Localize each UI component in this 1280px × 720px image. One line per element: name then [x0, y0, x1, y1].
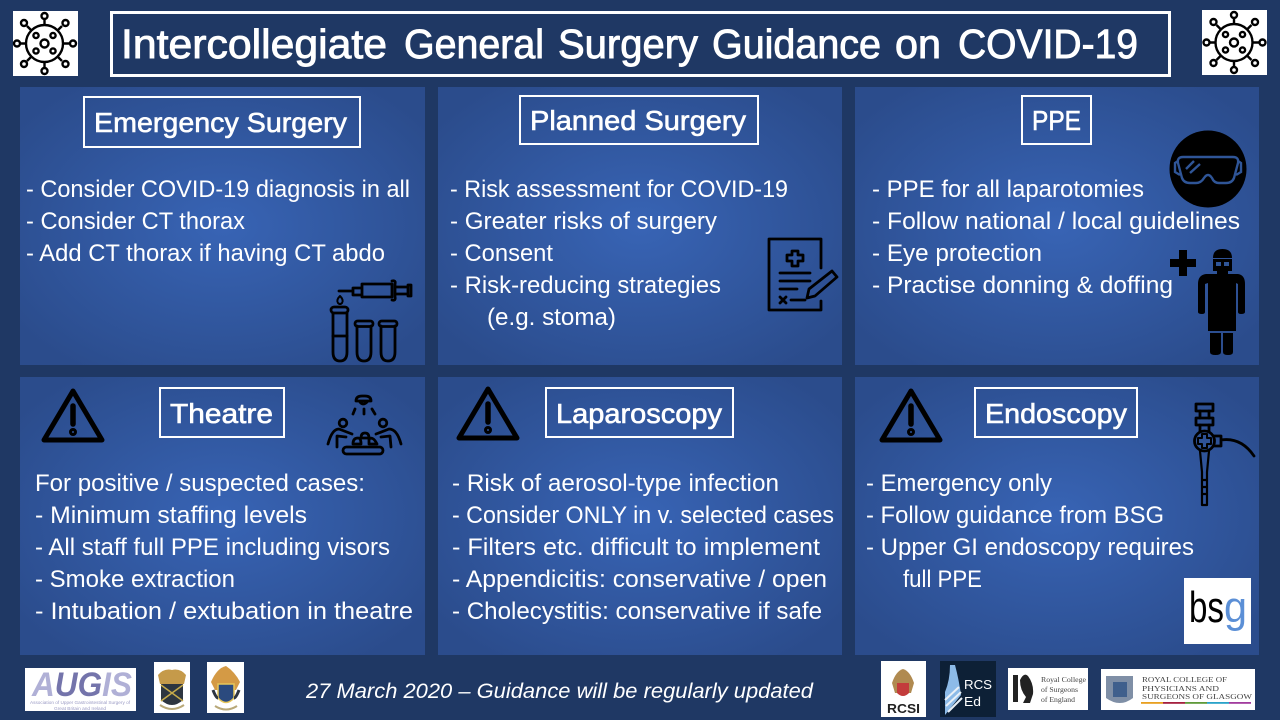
text: laparoscopy points: - Appendicitis: conservative / open	[452, 566, 827, 593]
title	[112, 12, 1170, 76]
text: PPE points: - Practise donning & doffing	[872, 272, 1173, 299]
text: theatre points: - Minimum staffing levels	[35, 502, 307, 529]
icon: virus left	[13, 11, 78, 76]
logo: BSG	[1184, 578, 1251, 644]
panel: endoscopy	[855, 377, 1259, 655]
title: Surgery	[558, 21, 698, 67]
heading: emergency surgery: Emergency Surgery	[94, 107, 347, 138]
logo: RCSEd	[940, 661, 996, 717]
logo: crest one	[154, 662, 190, 713]
heading: emergency surgery	[84, 97, 360, 147]
logo: RCSEd: Ed	[964, 694, 981, 709]
icon: warning triangle theatre	[44, 391, 102, 440]
icon: warning triangle laparoscopy	[459, 389, 517, 438]
text: planned surgery points: - Greater risks of surgery	[450, 208, 718, 235]
panel: planned surgery	[438, 87, 842, 365]
logo: BSG: bs	[1189, 583, 1224, 632]
logo: crest two	[207, 662, 244, 713]
logo: BSG: g	[1224, 583, 1247, 632]
text: theatre points: For positive / suspected cases:	[35, 470, 365, 497]
title: COVID-19	[958, 21, 1138, 67]
text: theatre points: - All staff full PPE including visors	[35, 534, 390, 561]
heading: planned surgery: Planned Surgery	[530, 105, 746, 136]
text: PPE points: - PPE for all laparotomies	[872, 176, 1144, 203]
text: theatre points	[35, 470, 413, 625]
text: laparoscopy points: - Consider ONLY in v. selected cases	[452, 502, 834, 529]
text: planned surgery points: - Consent	[450, 240, 553, 267]
panel: PPE	[855, 87, 1259, 365]
icon: syringe and test tubes	[331, 281, 411, 361]
text: PPE points: - Eye protection	[872, 240, 1042, 267]
text: endoscopy points: - Follow guidance from BSG	[866, 502, 1164, 529]
heading: planned surgery	[520, 96, 758, 144]
text: endoscopy points	[866, 470, 1194, 593]
logo: RCSEd: RCS	[964, 677, 992, 692]
logo: AUGIS: Great Britain and Ireland	[54, 706, 107, 711]
logo: Royal College of Surgeons of England	[1008, 668, 1088, 710]
heading: PPE	[1022, 96, 1091, 144]
icon: gown and plus	[1170, 249, 1245, 355]
logo: Royal College of Physicians and Surgeons of Glasgow	[1101, 669, 1255, 710]
logo: Royal College of Physicians and Surgeons of Glasgow: PHYSICIANS AND	[1142, 684, 1220, 693]
footer date note: 27 March 2020 – Guidance will be regularly updated	[305, 679, 814, 703]
icon: warning triangle endoscopy	[882, 391, 940, 440]
icon: operating theatre	[328, 396, 401, 454]
panel: laparoscopy	[438, 377, 842, 655]
logo: Royal College of Surgeons of England: of Surgeons	[1041, 685, 1078, 694]
text: laparoscopy points	[452, 470, 834, 625]
logo: RCSI: RCSI	[887, 702, 920, 716]
title: on	[895, 21, 941, 67]
heading: theatre: Theatre	[170, 398, 273, 429]
icon: endoscope	[1194, 404, 1254, 505]
logo: AUGIS: Association of Upper Gastrointestinal Surgery of	[30, 700, 131, 705]
heading: laparoscopy	[546, 388, 733, 437]
title: General	[404, 21, 544, 67]
text: laparoscopy points: - Risk of aerosol-type infection	[452, 470, 779, 497]
logo: AUGIS: AUGIS	[31, 666, 132, 704]
title: Guidance	[712, 21, 881, 67]
text: emergency surgery points: - Add CT thorax if having CT abdo	[26, 240, 385, 267]
text: planned surgery points: - Risk-reducing strategies	[450, 272, 721, 299]
logo: Royal College of Physicians and Surgeons of Glasgow: SURGEONS OF GLASGOW	[1142, 692, 1253, 701]
icon: virus right	[1202, 10, 1267, 75]
text: emergency surgery points	[26, 176, 410, 267]
logo: Royal College of Surgeons of England: Royal College	[1041, 675, 1087, 684]
text: emergency surgery points: - Consider COVID-19 diagnosis in all	[26, 176, 410, 203]
text: planned surgery points: (e.g. stoma)	[487, 304, 616, 331]
heading: endoscopy	[975, 388, 1137, 437]
heading: endoscopy: Endoscopy	[985, 398, 1127, 429]
icon: consent form	[769, 239, 837, 310]
text: theatre points: - Smoke extraction	[35, 566, 235, 593]
logo: Royal College of Physicians and Surgeons of Glasgow: ROYAL COLLEGE OF	[1142, 675, 1227, 684]
text: theatre points: - Intubation / extubation in theatre	[35, 598, 413, 625]
text: PPE points: - Follow national / local guidelines	[872, 208, 1240, 235]
icon: goggles	[1170, 130, 1246, 208]
text: laparoscopy points: - Cholecystitis: conservative if safe	[452, 598, 822, 625]
text: planned surgery points: - Risk assessment for COVID-19	[450, 176, 788, 203]
heading: theatre	[160, 388, 284, 437]
text: planned surgery points	[450, 176, 788, 331]
logo: RCSI	[881, 661, 926, 717]
text: emergency surgery points: - Consider CT thorax	[26, 208, 245, 235]
heading: laparoscopy: Laparoscopy	[556, 398, 722, 429]
panel: theatre	[20, 377, 425, 655]
text: PPE points	[872, 176, 1240, 299]
heading: PPE: PPE	[1032, 105, 1081, 136]
text: endoscopy points: - Emergency only	[866, 470, 1053, 497]
text: laparoscopy points: - Filters etc. difficult to implement	[452, 534, 820, 561]
text: endoscopy points: - Upper GI endoscopy requires	[866, 534, 1194, 561]
text: endoscopy points: full PPE	[903, 566, 982, 593]
logo: Royal College of Surgeons of England: of England	[1041, 695, 1075, 704]
panel: emergency surgery	[20, 87, 425, 365]
title: Intercollegiate	[121, 21, 387, 67]
